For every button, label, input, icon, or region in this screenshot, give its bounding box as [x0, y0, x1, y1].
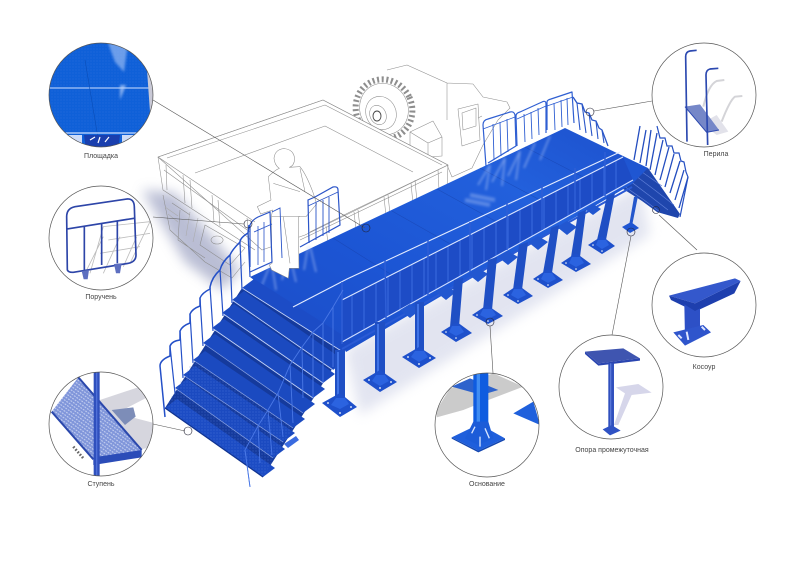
- leader lines: [153, 100, 697, 435]
- cargo bed: [158, 100, 448, 278]
- column 8: [561, 210, 591, 272]
- support columns: [322, 193, 639, 417]
- label: Опора промежуточная: Опора промежуточная: [575, 447, 649, 454]
- spare wheel: [346, 70, 422, 148]
- left stepped handrail: [160, 225, 250, 417]
- label: Площадка: Площадка: [84, 153, 118, 160]
- callout: Опора промежуточная: [559, 335, 663, 439]
- column 3: [402, 302, 436, 368]
- column 6: [503, 242, 533, 304]
- stair treads: [165, 279, 355, 477]
- label: Ступень: Ступень: [87, 481, 115, 488]
- person: [257, 149, 317, 278]
- near railing panels: [250, 187, 340, 272]
- callout: Ступень: [49, 370, 155, 480]
- right stair railing: [245, 290, 343, 487]
- back railing panels: [483, 92, 574, 166]
- column 2: [363, 322, 397, 392]
- callout: Перила: [652, 43, 756, 147]
- callout: Основание: [435, 372, 540, 477]
- callout: Косоур: [652, 253, 756, 357]
- label: Перила: Перила: [704, 151, 728, 158]
- column 5: [472, 257, 503, 324]
- ground shadows: [142, 185, 650, 415]
- label: Косоур: Косоур: [693, 364, 715, 371]
- column 1: [322, 350, 357, 417]
- brackets: [400, 204, 601, 318]
- intermediate support: [622, 196, 639, 233]
- cab: [387, 65, 510, 177]
- cargo box: [410, 121, 442, 157]
- far end stairs: [573, 97, 688, 218]
- front guard rail: [293, 152, 633, 349]
- label: Основание: Основание: [469, 481, 505, 488]
- column 4: [441, 278, 472, 342]
- callout: Поручень: [49, 186, 153, 290]
- truck line drawing: [158, 65, 510, 278]
- deck panels: [333, 147, 585, 277]
- label: Поручень: Поручень: [85, 294, 117, 301]
- column 9: [588, 193, 615, 254]
- column 7: [533, 225, 563, 288]
- platform deck: [250, 128, 648, 352]
- callout: Площадка: [49, 43, 153, 150]
- deck glints: [262, 136, 550, 290]
